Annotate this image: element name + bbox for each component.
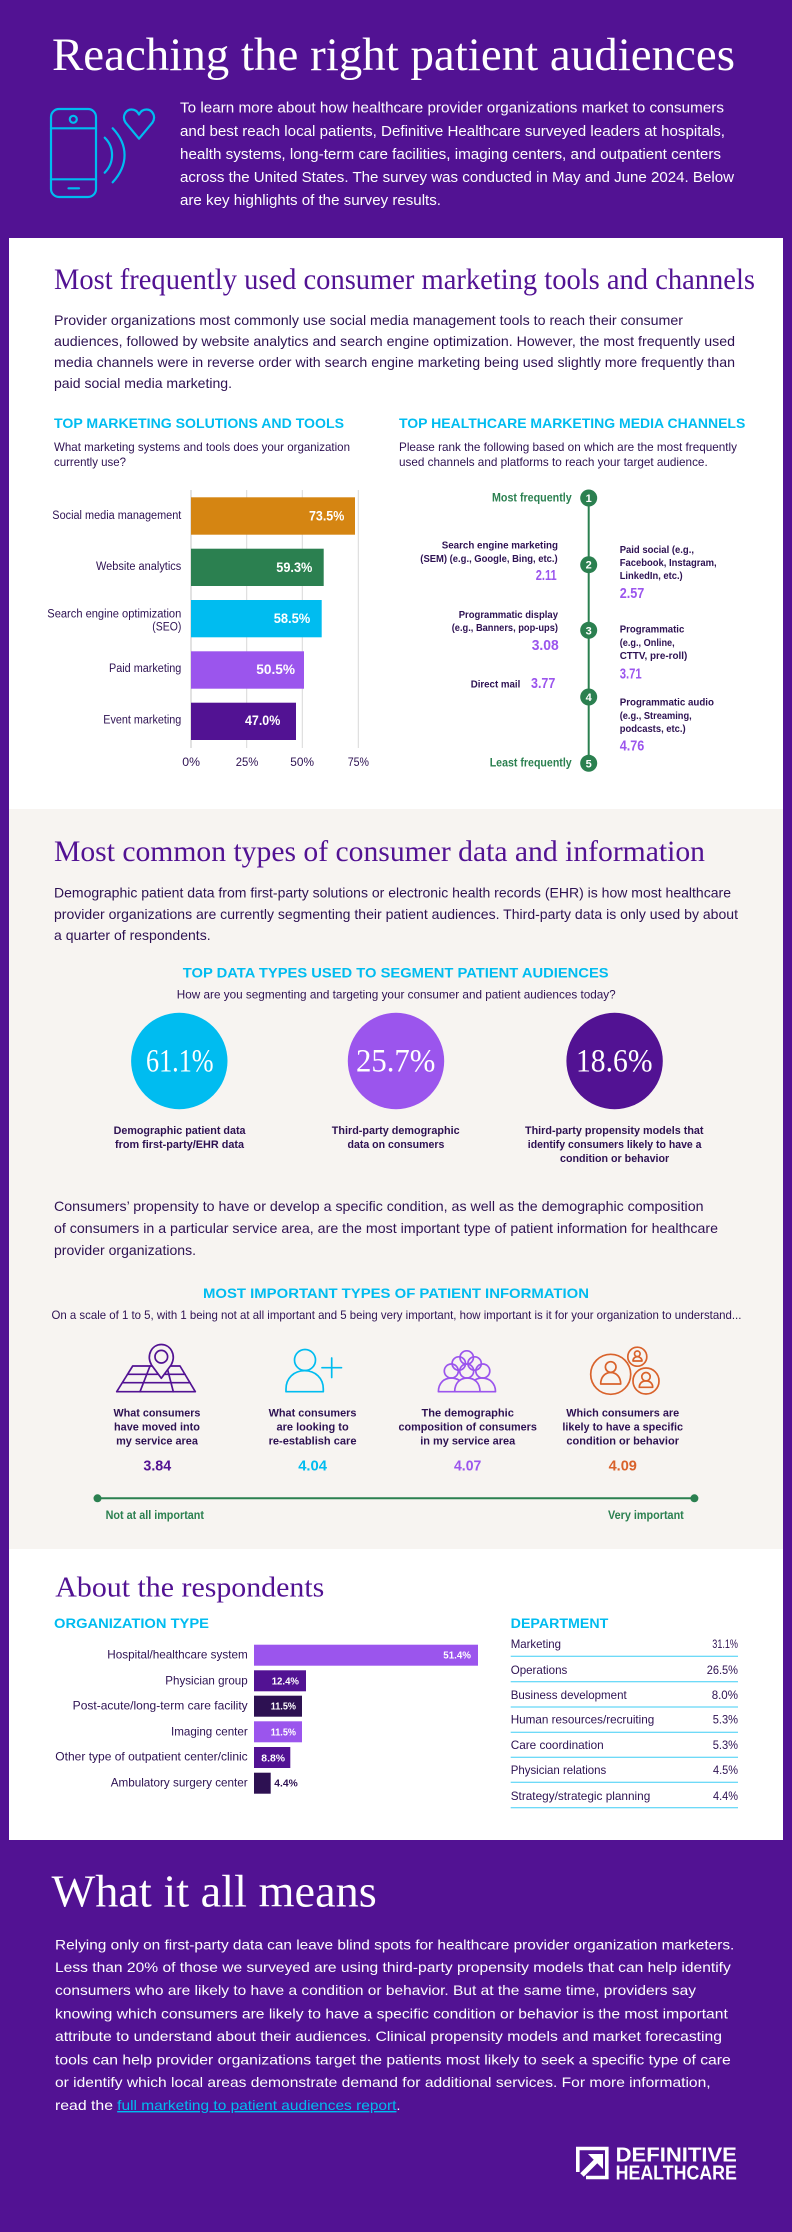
table: department: [511, 1637, 738, 1808]
bar: website analytics: 59.3%: [276, 559, 313, 575]
channel: programmatic: [620, 625, 687, 683]
channel: paid social: Paid social (e.g.,: [620, 545, 694, 556]
text block: conclusion: Relying only on first-party data can leave blind spots for healthcare provider organization marketers.: [55, 1936, 734, 1952]
rank numbers: 3: [586, 625, 592, 637]
item: re-establish care: are looking to: [276, 1422, 349, 1434]
bar: search engine optimization: (SEO): [152, 621, 181, 633]
heading: most common types: Most common types of consumer data and information: [54, 835, 705, 868]
table heading: department: DEPARTMENT: [511, 1616, 609, 1631]
item: re-establish care: re-establish care: [269, 1436, 356, 1448]
row: care coordination: 5.3%: [713, 1738, 738, 1752]
item: moved into service area: [114, 1344, 200, 1475]
channel: programmatic: CTTV, pre-roll): [620, 651, 687, 662]
text block: conclusion: full marketing to patient audiences report: [117, 2097, 397, 2113]
row: physician relations: [511, 1763, 738, 1777]
item: moved into service area: have moved into: [114, 1422, 200, 1434]
channel: programmatic display: 3.08: [532, 637, 559, 654]
channel: direct mail: [471, 675, 555, 692]
title: Reaching the right patient audiences: [52, 29, 735, 81]
channel: programmatic display: (e.g., Banners, pop-ups): [452, 623, 558, 634]
intro text: across the United States. The survey was conducted in May and June 2024. Below: [180, 169, 734, 186]
item: moved into service area: 3.84: [143, 1458, 172, 1475]
chart heading: organization type: ORGANIZATION TYPE: [54, 1616, 209, 1631]
intro text: To learn more about how healthcare provider organizations market to consumers: [180, 100, 724, 117]
channel: programmatic: 3.71: [620, 666, 642, 683]
chart question: marketing systems: [54, 440, 350, 469]
channel: programmatic display: [452, 610, 559, 654]
channel: programmatic audio: Programmatic audio: [620, 698, 714, 709]
channel: programmatic display: Programmatic display: [459, 610, 558, 621]
channel: paid social: Facebook, Instagram,: [620, 558, 717, 569]
item: demographic composition: composition of consumers: [398, 1422, 537, 1434]
icon: people in circles: [591, 1347, 659, 1394]
intro text: are key highlights of the survey results.: [180, 192, 441, 209]
chart question: segmenting: How are you segmenting and targeting your consumer and patient audiences today?: [177, 988, 616, 1002]
bar: physician group: 12.4%: [272, 1676, 300, 1688]
text block: conclusion: read the: [55, 2097, 113, 2113]
bar: post-acute: [73, 1696, 302, 1717]
row: business development: 8.0%: [712, 1688, 738, 1702]
text block: conclusion: or identify which local areas demonstrate demand for additional services. For more information,: [55, 2074, 711, 2090]
row: business development: Business development: [511, 1688, 627, 1702]
panel: what it all means: [52, 1866, 737, 2184]
bar: hospital: [107, 1645, 478, 1666]
row: care coordination: [511, 1738, 738, 1752]
row: physician relations: 4.5%: [713, 1763, 738, 1777]
label: most frequently: Most frequently: [492, 493, 572, 505]
timeline: channel ranking: [420, 490, 717, 772]
text block: tools summary: [54, 312, 735, 391]
chart heading: top marketing solutions: TOP MARKETING SOLUTIONS AND TOOLS: [54, 416, 344, 431]
bar: social media management: 73.5%: [309, 508, 345, 524]
text block: conclusion: Less than 20% of those we surveyed are using third-party propensity models that can help identify: [55, 1959, 731, 1975]
channel: programmatic: Programmatic: [620, 625, 685, 636]
channel: direct mail: Direct mail: [471, 680, 520, 691]
item: moved into service area: What consumers: [114, 1408, 200, 1420]
row: marketing: 31.1%: [712, 1637, 738, 1651]
row: operations: 26.5%: [707, 1663, 738, 1677]
bar: search engine optimization: 58.5%: [274, 610, 311, 626]
channel: search engine marketing: Search engine marketing: [442, 541, 558, 552]
bar: paid marketing: 50.5%: [256, 661, 296, 677]
chart question: rank channels: used channels and platforms to reach your target audience.: [399, 455, 708, 469]
stat: third-party demographic: data on consumers: [348, 1139, 444, 1151]
axis labels: 75%: [348, 757, 369, 769]
rank numbers: 5: [586, 758, 592, 770]
text block: tools summary: audiences, followed by website analytics and search engine optimization. However, the most frequently used: [54, 333, 735, 349]
row: physician relations: Physician relations: [511, 1763, 606, 1777]
row: marketing: Marketing: [511, 1637, 561, 1651]
bar: imaging center: 11.5%: [271, 1727, 297, 1739]
text block: tools summary: Provider organizations most commonly use social media management tools to reach their consumer: [54, 312, 683, 328]
intro text: health systems, long-term care facilities, imaging centers, and outpatient centers: [180, 146, 721, 163]
bar: social media management: Social media management: [52, 510, 182, 522]
heading: about the respondents: About the respondents: [55, 1572, 324, 1604]
rank markers: [580, 490, 597, 772]
channel: programmatic: (e.g., Online,: [620, 638, 675, 649]
label: least frequently: Least frequently: [490, 758, 572, 770]
bar: other outpatient: [55, 1747, 290, 1768]
panel: header: [51, 29, 735, 209]
text block: segmentation summary: [54, 885, 738, 943]
bar: ambulatory surgery: 4.4%: [274, 1778, 298, 1790]
chart heading: top media channels: TOP HEALTHCARE MARKETING MEDIA CHANNELS: [399, 416, 745, 431]
stat: third-party demographic: [332, 1013, 460, 1151]
chart question: rank channels: Please rank the following based on which are the most frequently: [399, 440, 737, 454]
row: human resources: Human resources/recruiting: [511, 1713, 654, 1727]
bar: imaging center: Imaging center: [171, 1725, 248, 1739]
icon: person with plus: [286, 1350, 342, 1392]
bar: ambulatory surgery: Ambulatory surgery center: [111, 1776, 248, 1790]
item: demographic composition: in my service area: [420, 1436, 516, 1448]
logo: Definitive Healthcare: HEALTHCARE: [616, 2162, 737, 2184]
row: strategy: [511, 1789, 738, 1803]
bar chart: organization type: [55, 1645, 478, 1794]
intro text: and best reach local patients, Definitive Healthcare surveyed leaders at hospitals,: [180, 123, 725, 140]
item: likely to have a condition: Which consumers are: [566, 1408, 679, 1420]
logo: Definitive Healthcare: DEFINITIVE: [616, 2145, 737, 2167]
bar chart: marketing solutions: [47, 490, 369, 769]
item: moved into service area: my service area: [116, 1436, 199, 1448]
channel: paid social: [620, 545, 717, 602]
chart question: marketing systems: What marketing systems and tools does your organization: [54, 440, 350, 454]
bar: post-acute: Post-acute/long-term care facility: [73, 1699, 248, 1713]
bar: hospital: 51.4%: [443, 1650, 472, 1662]
channel: programmatic audio: (e.g., Streaming,: [620, 711, 692, 722]
text block: propensity summary: Consumers’ propensity to have or develop a specific condition, as well as the demographic composition: [54, 1198, 704, 1214]
row: business development: [511, 1688, 738, 1702]
row: marketing: [511, 1637, 738, 1651]
panel: consumer data and information: [9, 809, 783, 1549]
row: human resources: [511, 1713, 738, 1727]
intro text: [180, 100, 734, 209]
text block: conclusion: attribute to understand about their audiences. Clinical propensity models and market forecasting: [55, 2028, 722, 2044]
bar: imaging center: [171, 1721, 302, 1742]
rank numbers: 2: [586, 560, 592, 572]
stat: demographic patient data: Demographic patient data: [114, 1125, 246, 1137]
icon: logo arrow mark: [578, 2148, 607, 2178]
axis labels: 0%: [182, 757, 200, 769]
stat: third-party demographic: 25.7%: [356, 1044, 435, 1080]
stat: third-party propensity models: identify consumers likely to have a: [528, 1139, 702, 1151]
panel: marketing tools and channels: [9, 238, 783, 809]
row: strategy: Strategy/strategic planning: [511, 1789, 650, 1803]
bar: event marketing: 47.0%: [245, 712, 281, 728]
item: demographic composition: [398, 1351, 537, 1475]
importance scale: Not at all important: [106, 1510, 204, 1522]
bar: other outpatient: Other type of outpatient center/clinic: [55, 1750, 248, 1764]
channel: programmatic audio: 4.76: [620, 738, 644, 755]
bar: ambulatory surgery: [111, 1773, 298, 1794]
icon: phone with signal and heart: [51, 109, 154, 197]
channel: search engine marketing: [420, 541, 558, 584]
channel: search engine marketing: 2.11: [536, 567, 557, 584]
row: strategy: 4.4%: [713, 1789, 738, 1803]
item: re-establish care: [269, 1350, 356, 1475]
stat: third-party propensity models: Third-party propensity models that: [525, 1125, 704, 1137]
chart question: importance scale: On a scale of 1 to 5, with 1 being not at all important and 5 being very important, how important is it for your organization to understand...: [52, 1308, 741, 1322]
text block: tools summary: paid social media marketing.: [54, 375, 232, 391]
rank numbers: 1: [586, 493, 592, 505]
bar: other outpatient: 8.8%: [261, 1753, 286, 1765]
stat: third-party propensity models: condition or behavior: [560, 1153, 670, 1165]
row: human resources: 5.3%: [713, 1713, 738, 1727]
text block: conclusion: .: [396, 2097, 400, 2113]
stat: demographic patient data: 61.1%: [146, 1044, 214, 1080]
stat: third-party demographic: Third-party demographic: [332, 1125, 460, 1137]
stat: demographic patient data: from first-party/EHR data: [115, 1139, 245, 1151]
icon: map with pin: [117, 1344, 195, 1392]
logo: Definitive Healthcare: [578, 2145, 737, 2184]
channel: paid social: 2.57: [620, 585, 644, 602]
stat: third-party propensity models: 18.6%: [576, 1044, 652, 1080]
text block: conclusion: [55, 1936, 734, 2113]
axis labels: 50%: [290, 757, 314, 769]
channel: programmatic audio: [620, 698, 714, 755]
heading: most frequently used tools: Most frequently used consumer marketing tools and channels: [54, 263, 755, 296]
icon: crowd: [438, 1351, 496, 1392]
text block: conclusion: tools can help provider organizations target the patients most likely to seek a specific type of care: [55, 2051, 731, 2067]
bar: physician group: Physician group: [165, 1674, 248, 1688]
chart heading: most important types: MOST IMPORTANT TYPES OF PATIENT INFORMATION: [203, 1286, 589, 1301]
chart heading: top data types: TOP DATA TYPES USED TO SEGMENT PATIENT AUDIENCES: [183, 966, 609, 981]
channel: direct mail: 3.77: [531, 675, 555, 692]
bar: website analytics: [96, 549, 324, 586]
rank numbers: 4: [586, 692, 593, 704]
text block: conclusion: consumers who are likely to have a condition or behavior. But at the same time, providers say: [55, 1982, 696, 1998]
chart question: rank channels: [399, 440, 737, 469]
row: care coordination: Care coordination: [511, 1738, 604, 1752]
item: likely to have a condition: 4.09: [609, 1458, 637, 1475]
stat: third-party propensity models: [525, 1013, 704, 1165]
channel: search engine marketing: (SEM) (e.g., Google, Bing, etc.): [420, 554, 558, 565]
bar: social media management: [52, 497, 355, 535]
item: re-establish care: 4.04: [298, 1458, 328, 1475]
text block: propensity summary: provider organizations.: [54, 1242, 196, 1258]
item: demographic composition: 4.07: [454, 1458, 481, 1475]
bar: hospital: Hospital/healthcare system: [107, 1648, 248, 1662]
bar: event marketing: [103, 703, 296, 740]
axis labels: 25%: [236, 757, 258, 769]
importance scale: [94, 1494, 698, 1522]
row: operations: [511, 1663, 738, 1677]
text block: conclusion: knowing which consumers are likely to have a specific condition or behavior is the most important: [55, 2005, 728, 2021]
heading: what it all means: What it all means: [52, 1866, 377, 1917]
bar: website analytics: Website analytics: [96, 561, 182, 573]
text block: tools summary: media channels were in reverse order with search engine marketing being used slightly more frequently than: [54, 354, 735, 370]
bar: event marketing: Event marketing: [103, 714, 181, 726]
channel: programmatic audio: podcasts, etc.): [620, 724, 686, 735]
bar: paid marketing: [109, 651, 304, 689]
item: demographic composition: The demographic: [422, 1408, 514, 1420]
bar: search engine optimization: [47, 600, 322, 637]
stat: demographic patient data: [114, 1013, 246, 1151]
text block: segmentation summary: a quarter of respondents.: [54, 927, 211, 943]
text block: propensity summary: of consumers in a particular service area, are the most important type of patient information for healthcare: [54, 1220, 718, 1236]
axis labels: [182, 757, 369, 769]
item: likely to have a condition: condition or behavior: [566, 1436, 680, 1448]
text block: propensity summary: [54, 1198, 718, 1258]
bar: search engine optimization: Search engine optimization: [47, 608, 181, 620]
text block: segmentation summary: provider organizations are currently segmenting their patient audiences. Third-party data is only used by about: [54, 906, 738, 922]
bar: post-acute: 11.5%: [271, 1701, 297, 1713]
item: likely to have a condition: [562, 1347, 683, 1475]
text block: segmentation summary: Demographic patient data from first-party solutions or electronic health records (EHR) is how most healthcare: [54, 885, 731, 901]
row: operations: Operations: [511, 1663, 567, 1677]
channel: paid social: LinkedIn, etc.): [620, 571, 683, 582]
bar: paid marketing: Paid marketing: [109, 663, 181, 675]
item: re-establish care: What consumers: [269, 1408, 356, 1420]
bar: physician group: [165, 1670, 306, 1691]
chart question: marketing systems: currently use?: [54, 455, 126, 469]
importance scale: Very important: [608, 1510, 684, 1522]
panel: about the respondents: [9, 1549, 783, 1840]
item: likely to have a condition: likely to have a specific: [562, 1422, 683, 1434]
rank numbers: [586, 493, 593, 770]
